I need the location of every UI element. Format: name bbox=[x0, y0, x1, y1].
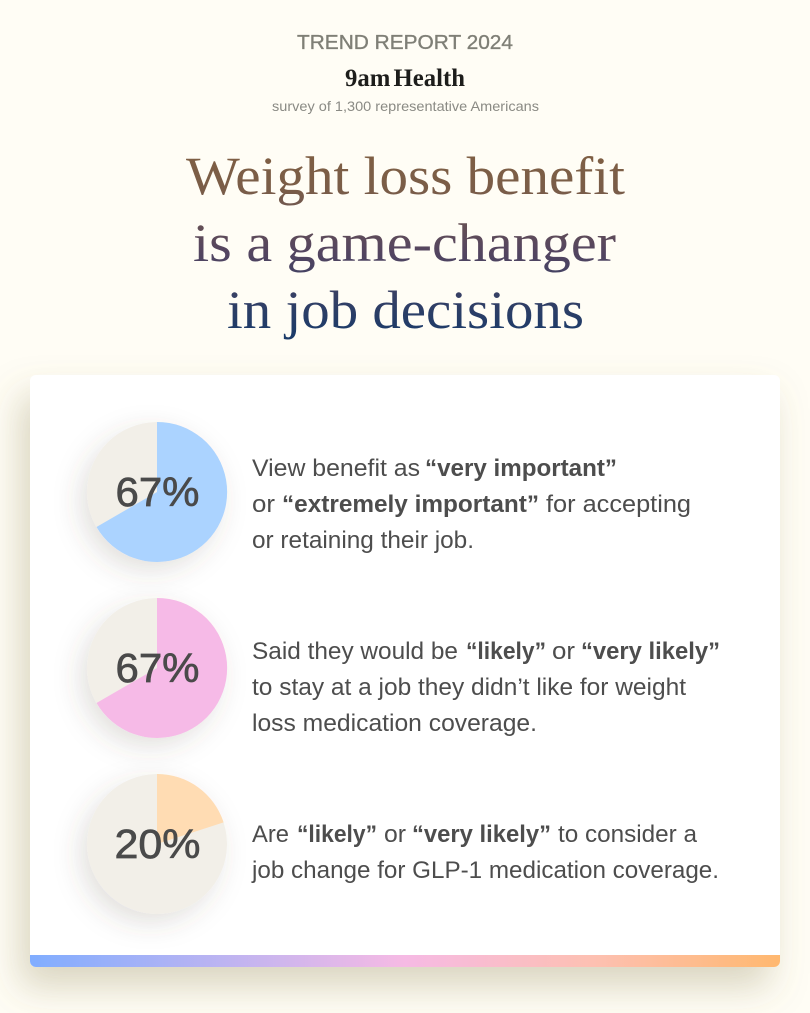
text: said they would: “likely” bbox=[466, 638, 546, 665]
text: said they would: Said they would be bbox=[252, 638, 458, 665]
title: in job decisions bbox=[227, 280, 584, 340]
text: view benefit: View benefit as bbox=[252, 455, 420, 482]
text: job change: Are bbox=[252, 821, 289, 848]
text: job change: job change for GLP-1 medication coverage. bbox=[251, 857, 719, 884]
pie chart: 67% important: 67% bbox=[116, 469, 200, 515]
pie chart: 67% important bbox=[87, 422, 227, 562]
text: view benefit bbox=[252, 455, 691, 554]
pie chart: 20% job change bbox=[87, 774, 227, 914]
pie chart: 67% stay at job: 67% bbox=[116, 645, 200, 691]
gradient bar bbox=[30, 955, 780, 967]
text: job change: to consider a bbox=[558, 821, 698, 848]
pie chart: 67% stay at job bbox=[87, 598, 227, 738]
pie chart: 20% job change: 20% bbox=[114, 821, 200, 867]
text: said they would: “very likely” bbox=[581, 638, 720, 665]
text: job change: “very likely” bbox=[412, 821, 551, 848]
title bbox=[186, 146, 625, 340]
text: said they would: or bbox=[552, 638, 575, 665]
panel: statistics card bbox=[30, 375, 780, 967]
brand logo: 9am Health: 9am Health bbox=[345, 65, 465, 92]
header label: trend report: TREND REPORT 2024 bbox=[297, 32, 513, 54]
title: is a game-changer bbox=[193, 213, 616, 273]
text: view benefit: “extremely important” bbox=[282, 491, 539, 518]
text: job change bbox=[251, 821, 719, 884]
text: job change: or bbox=[384, 821, 406, 848]
text: said they would bbox=[252, 638, 720, 737]
survey note: survey of 1,300 representative Americans bbox=[272, 98, 539, 114]
text: view benefit: for accepting bbox=[546, 491, 691, 518]
text: job change: “likely” bbox=[297, 821, 377, 848]
text: view benefit: “very important” bbox=[425, 455, 617, 482]
text: said they would: loss medication coverage. bbox=[252, 710, 537, 737]
text: view benefit: or bbox=[252, 491, 275, 518]
text: view benefit: or retaining their job. bbox=[252, 527, 474, 554]
text: said they would: to stay at a job they didn’t like for weight bbox=[252, 674, 686, 701]
title: Weight loss benefit bbox=[186, 146, 625, 206]
